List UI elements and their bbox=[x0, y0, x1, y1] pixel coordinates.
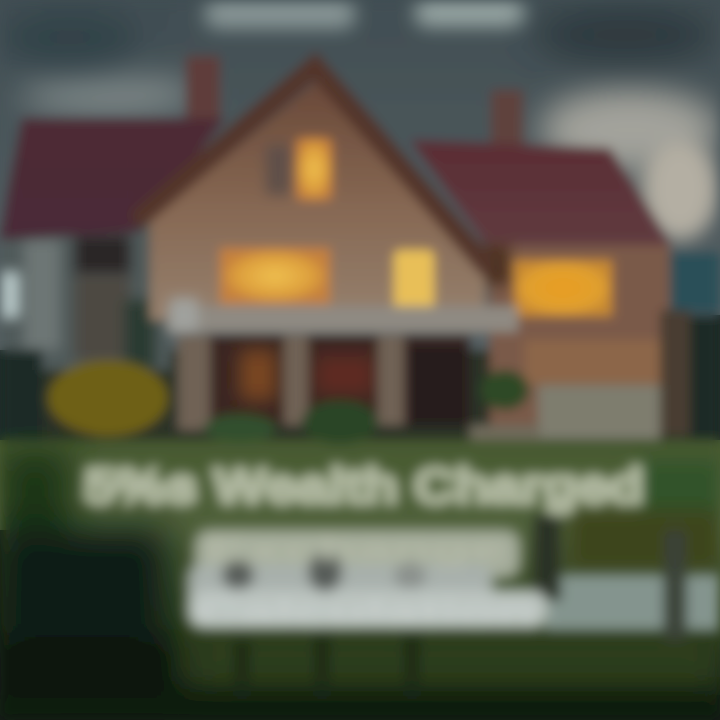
water strip and fence bbox=[534, 515, 720, 640]
title line 1: 5%s Wealth Charged bbox=[84, 458, 644, 514]
shrubs bbox=[0, 350, 529, 444]
foreground hedge bbox=[0, 450, 720, 720]
dark spot right bbox=[394, 563, 426, 589]
small window mid bbox=[394, 250, 434, 316]
far right dark trees bbox=[690, 315, 720, 440]
dark ground behind house bbox=[0, 350, 720, 445]
dark spot middle bbox=[308, 552, 342, 592]
large window left bbox=[220, 248, 330, 304]
porch posts bbox=[178, 335, 404, 430]
title line 3: Calculation bbox=[195, 594, 535, 632]
right roof bbox=[410, 140, 672, 250]
panel bbox=[188, 530, 548, 632]
porch beam bbox=[168, 306, 518, 332]
right window bbox=[514, 260, 612, 316]
lower right wall band bbox=[525, 340, 660, 384]
right lawn shading bbox=[570, 460, 720, 570]
sky background bbox=[0, 0, 720, 445]
gable roof edge bbox=[135, 66, 490, 270]
gable window bbox=[296, 138, 332, 200]
foreground grass posts bbox=[235, 635, 419, 690]
house bbox=[0, 56, 690, 440]
left roof bbox=[0, 118, 225, 240]
dark spot left bbox=[222, 560, 254, 590]
garage door bbox=[538, 385, 660, 439]
main gable wall bbox=[150, 80, 485, 320]
left wing wall bbox=[0, 220, 170, 370]
porch dark bbox=[205, 335, 470, 425]
distant hill bbox=[664, 252, 720, 312]
lawn bbox=[0, 440, 720, 720]
right wing wall bbox=[490, 245, 670, 435]
chimneys bbox=[186, 56, 220, 126]
title line 2: Exchange bbox=[205, 531, 505, 567]
